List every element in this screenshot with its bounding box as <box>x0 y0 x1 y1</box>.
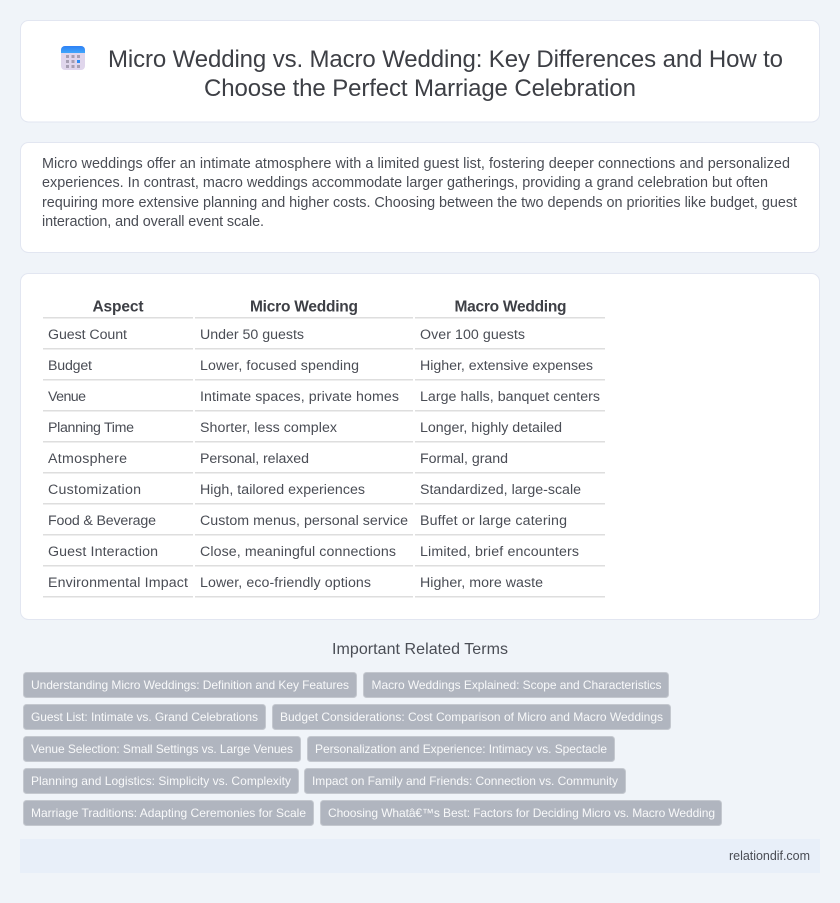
icon: calendar <box>61 46 85 70</box>
footer <box>20 839 820 873</box>
table rows <box>43 317 605 598</box>
panel: intro paragraph: interaction, and overall event scale. <box>42 214 264 230</box>
table rows: Lower, eco-friendly options <box>200 575 371 591</box>
panel: intro paragraph: experiences. In contrast, macro weddings accommodate larger gatherings, providing a grand celebration but often <box>42 175 768 191</box>
panel: comparison table <box>20 274 820 620</box>
table rows: Longer, highly detailed <box>420 420 562 436</box>
table header: Macro Wedding <box>454 298 566 316</box>
table rows: Guest Interaction <box>48 544 158 560</box>
table rows: Custom menus, personal service <box>200 513 408 529</box>
table rows: Standardized, large-scale <box>420 482 581 498</box>
panel: intro paragraph <box>20 142 820 252</box>
related term tags: Macro Weddings Explained: Scope and Characteristics <box>372 678 662 692</box>
table rows: Intimate spaces, private homes <box>200 389 399 405</box>
table rows: Budget <box>48 358 92 374</box>
table rows: Over 100 guests <box>420 327 525 343</box>
related term tags: Marriage Traditions: Adapting Ceremonies for Scale <box>31 806 306 820</box>
title <box>108 46 783 102</box>
related term tags: Understanding Micro Weddings: Definition and Key Features <box>31 678 349 692</box>
table rows: Personal, relaxed <box>200 451 309 467</box>
table rows: Limited, brief encounters <box>420 544 579 560</box>
title: Choose the Perfect Marriage Celebration <box>204 75 636 102</box>
related term tags: Budget Considerations: Cost Comparison of Micro and Macro Weddings <box>280 710 663 724</box>
table header: Aspect <box>92 298 144 316</box>
table rows: Higher, extensive expenses <box>420 358 593 374</box>
table rows: Planning Time <box>48 420 134 436</box>
related term tags: Personalization and Experience: Intimacy vs. Spectacle <box>315 742 607 756</box>
footer: relationdif.com <box>729 849 810 863</box>
table rows: Formal, grand <box>420 451 508 467</box>
related term tags: Planning and Logistics: Simplicity vs. Complexity <box>31 774 291 788</box>
panel: intro paragraph: requiring more extensive planning and higher costs. Choosing between the two depends on priorities like budget, guest <box>42 195 797 211</box>
table rows: Under 50 guests <box>200 327 304 343</box>
table rows: Customization <box>48 482 141 498</box>
table rows: Venue <box>48 389 86 405</box>
table rows: High, tailored experiences <box>200 482 365 498</box>
heading: important related terms: Important Related Terms <box>332 641 508 658</box>
related term tags <box>24 672 722 826</box>
table rows: Shorter, less complex <box>200 420 337 436</box>
table rows: Guest Count <box>48 327 127 343</box>
table rows: Buffet or large catering <box>420 513 567 529</box>
title: Micro Wedding vs. Macro Wedding: Key Differences and How to <box>108 46 783 73</box>
related term tags: Choosing Whatâ€™s Best: Factors for Deciding Micro vs. Macro Wedding <box>328 806 715 820</box>
table rows: Large halls, banquet centers <box>420 389 600 405</box>
table rows: Food & Beverage <box>48 513 156 529</box>
table rows: Close, meaningful connections <box>200 544 396 560</box>
table header <box>92 298 566 316</box>
table rows: Lower, focused spending <box>200 358 359 374</box>
table header: Micro Wedding <box>250 298 358 316</box>
panel: intro paragraph: Micro weddings offer an intimate atmosphere with a limited guest list, fostering deeper connections and personalized <box>42 156 790 172</box>
table rows: Environmental Impact <box>48 575 188 591</box>
table rows: Atmosphere <box>48 451 127 467</box>
table rows: Higher, more waste <box>420 575 543 591</box>
related term tags: Venue Selection: Small Settings vs. Large Venues <box>31 742 293 756</box>
header panel <box>20 20 820 122</box>
related term tags: Guest List: Intimate vs. Grand Celebrations <box>31 710 258 724</box>
related term tags: Impact on Family and Friends: Connection vs. Community <box>312 774 618 788</box>
